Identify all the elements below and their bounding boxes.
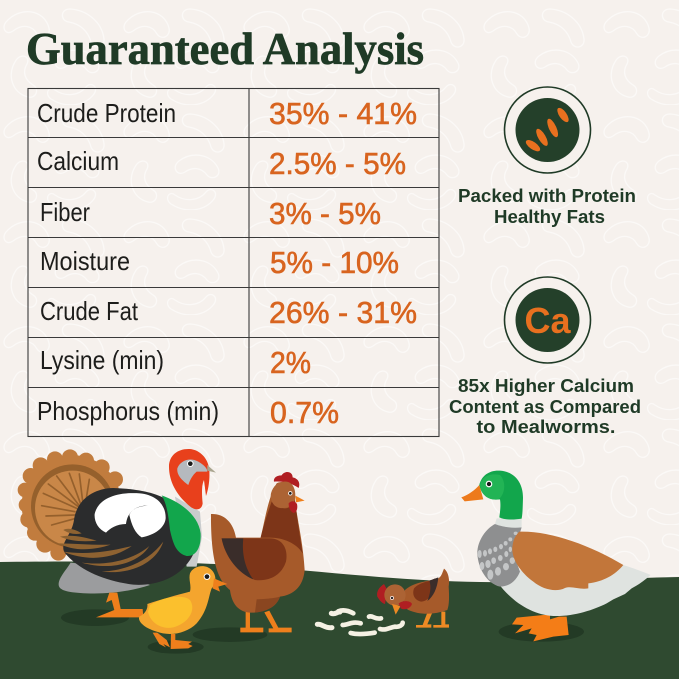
duck head and neck xyxy=(479,471,523,520)
table grid xyxy=(28,88,439,437)
turkey under-body grey xyxy=(59,563,150,593)
turkey white patch xyxy=(95,493,166,537)
row: crude fat: Crude Fat xyxy=(40,296,139,326)
turkey shadow xyxy=(61,609,129,626)
row: crude protein: 35% - 41% xyxy=(269,97,417,131)
caption: healthy fats: Healthy Fats xyxy=(494,206,605,227)
duck breast spots xyxy=(478,532,518,580)
row: lysine xyxy=(40,345,311,380)
caption: protein: Packed with Protein xyxy=(458,185,636,206)
row: crude protein: Crude Protein xyxy=(37,98,176,128)
turkey neck xyxy=(175,497,202,567)
hen belly shade xyxy=(255,597,280,613)
hen legs xyxy=(240,611,292,632)
small hen legs xyxy=(416,612,449,628)
small hen wing xyxy=(413,578,436,602)
hen wing xyxy=(222,538,287,580)
duck breast xyxy=(477,524,522,587)
turkey beak xyxy=(207,465,216,473)
duckling beak xyxy=(213,578,227,592)
row: fiber xyxy=(40,197,381,231)
mealworms xyxy=(338,610,403,634)
small hen body xyxy=(404,569,449,614)
row: calcium: Calcium xyxy=(37,146,119,176)
turkey tail fan xyxy=(18,449,123,561)
hen wattle xyxy=(289,501,297,513)
mallard duck xyxy=(461,471,651,642)
row: crude protein xyxy=(37,97,417,131)
row: crude fat xyxy=(40,296,417,330)
icon: calcium: Ca xyxy=(524,300,571,341)
duckling eye xyxy=(204,573,210,580)
row: crude fat: 26% - 31% xyxy=(269,296,417,330)
hen xyxy=(193,472,305,642)
row: moisture: 5% - 10% xyxy=(270,246,399,280)
ground xyxy=(0,561,679,679)
row: calcium xyxy=(37,146,406,181)
row: calcium: 2.5% - 5% xyxy=(269,147,406,181)
turkey eye xyxy=(187,460,194,467)
small hen beak xyxy=(392,604,401,615)
table: guaranteed analysis xyxy=(28,88,439,437)
duck collar xyxy=(495,518,522,528)
row: phosphorus: Phosphorus (min) xyxy=(37,396,219,426)
icon: calcium xyxy=(504,277,590,363)
hen wing dark tip xyxy=(222,538,253,579)
hen head xyxy=(271,481,295,508)
turkey head wattle xyxy=(169,449,209,509)
duck wing xyxy=(512,532,623,590)
duck tail and belly xyxy=(498,560,651,616)
turkey brown feathers xyxy=(58,529,163,572)
small hen pecking xyxy=(377,569,449,628)
right birds xyxy=(338,471,651,642)
duck shadow xyxy=(499,622,584,642)
turkey legs xyxy=(96,593,143,617)
duck bill xyxy=(461,485,483,501)
turkey body xyxy=(63,488,196,585)
caption: calcium: 85x Higher Calcium xyxy=(458,375,634,396)
icon: protein strand xyxy=(504,87,590,173)
duckling xyxy=(139,566,227,654)
duckling legs xyxy=(153,633,193,649)
small hen comb xyxy=(377,584,387,604)
small hen wing tip xyxy=(427,577,438,601)
small hen wattle xyxy=(399,601,412,609)
duckling body xyxy=(139,566,215,634)
row: moisture: Moisture xyxy=(40,246,130,276)
duckling wing xyxy=(148,597,192,628)
row: fiber: Fiber xyxy=(40,197,90,227)
hen shadow xyxy=(193,627,267,642)
duck eye xyxy=(486,481,492,487)
hen neck shade xyxy=(261,500,303,553)
hen beak xyxy=(295,496,305,502)
turkey xyxy=(18,449,216,626)
row: moisture xyxy=(40,246,399,280)
title: Guaranteed Analysis xyxy=(26,24,424,74)
row: lysine: Lysine (min) xyxy=(40,345,164,375)
duckling shadow xyxy=(148,640,204,654)
small hen head xyxy=(384,584,406,606)
caption: calcium: Content as Compared xyxy=(449,396,641,417)
duck feet xyxy=(512,615,569,641)
caption: calcium xyxy=(449,375,641,437)
small hen eye xyxy=(390,596,394,600)
turkey green wing xyxy=(162,495,201,556)
row: lysine: 2% xyxy=(270,346,311,380)
hen body xyxy=(211,482,305,613)
hen comb xyxy=(274,472,299,488)
worms left cluster xyxy=(317,612,340,628)
row: phosphorus xyxy=(37,396,339,430)
left birds xyxy=(18,449,340,654)
caption: calcium: to Mealworms. xyxy=(476,416,616,437)
row: fiber: 3% - 5% xyxy=(269,197,381,231)
duck cheek highlight xyxy=(480,474,504,500)
row: phosphorus: 0.7% xyxy=(270,396,339,430)
turkey face xyxy=(177,459,207,485)
hen eye xyxy=(288,491,292,495)
